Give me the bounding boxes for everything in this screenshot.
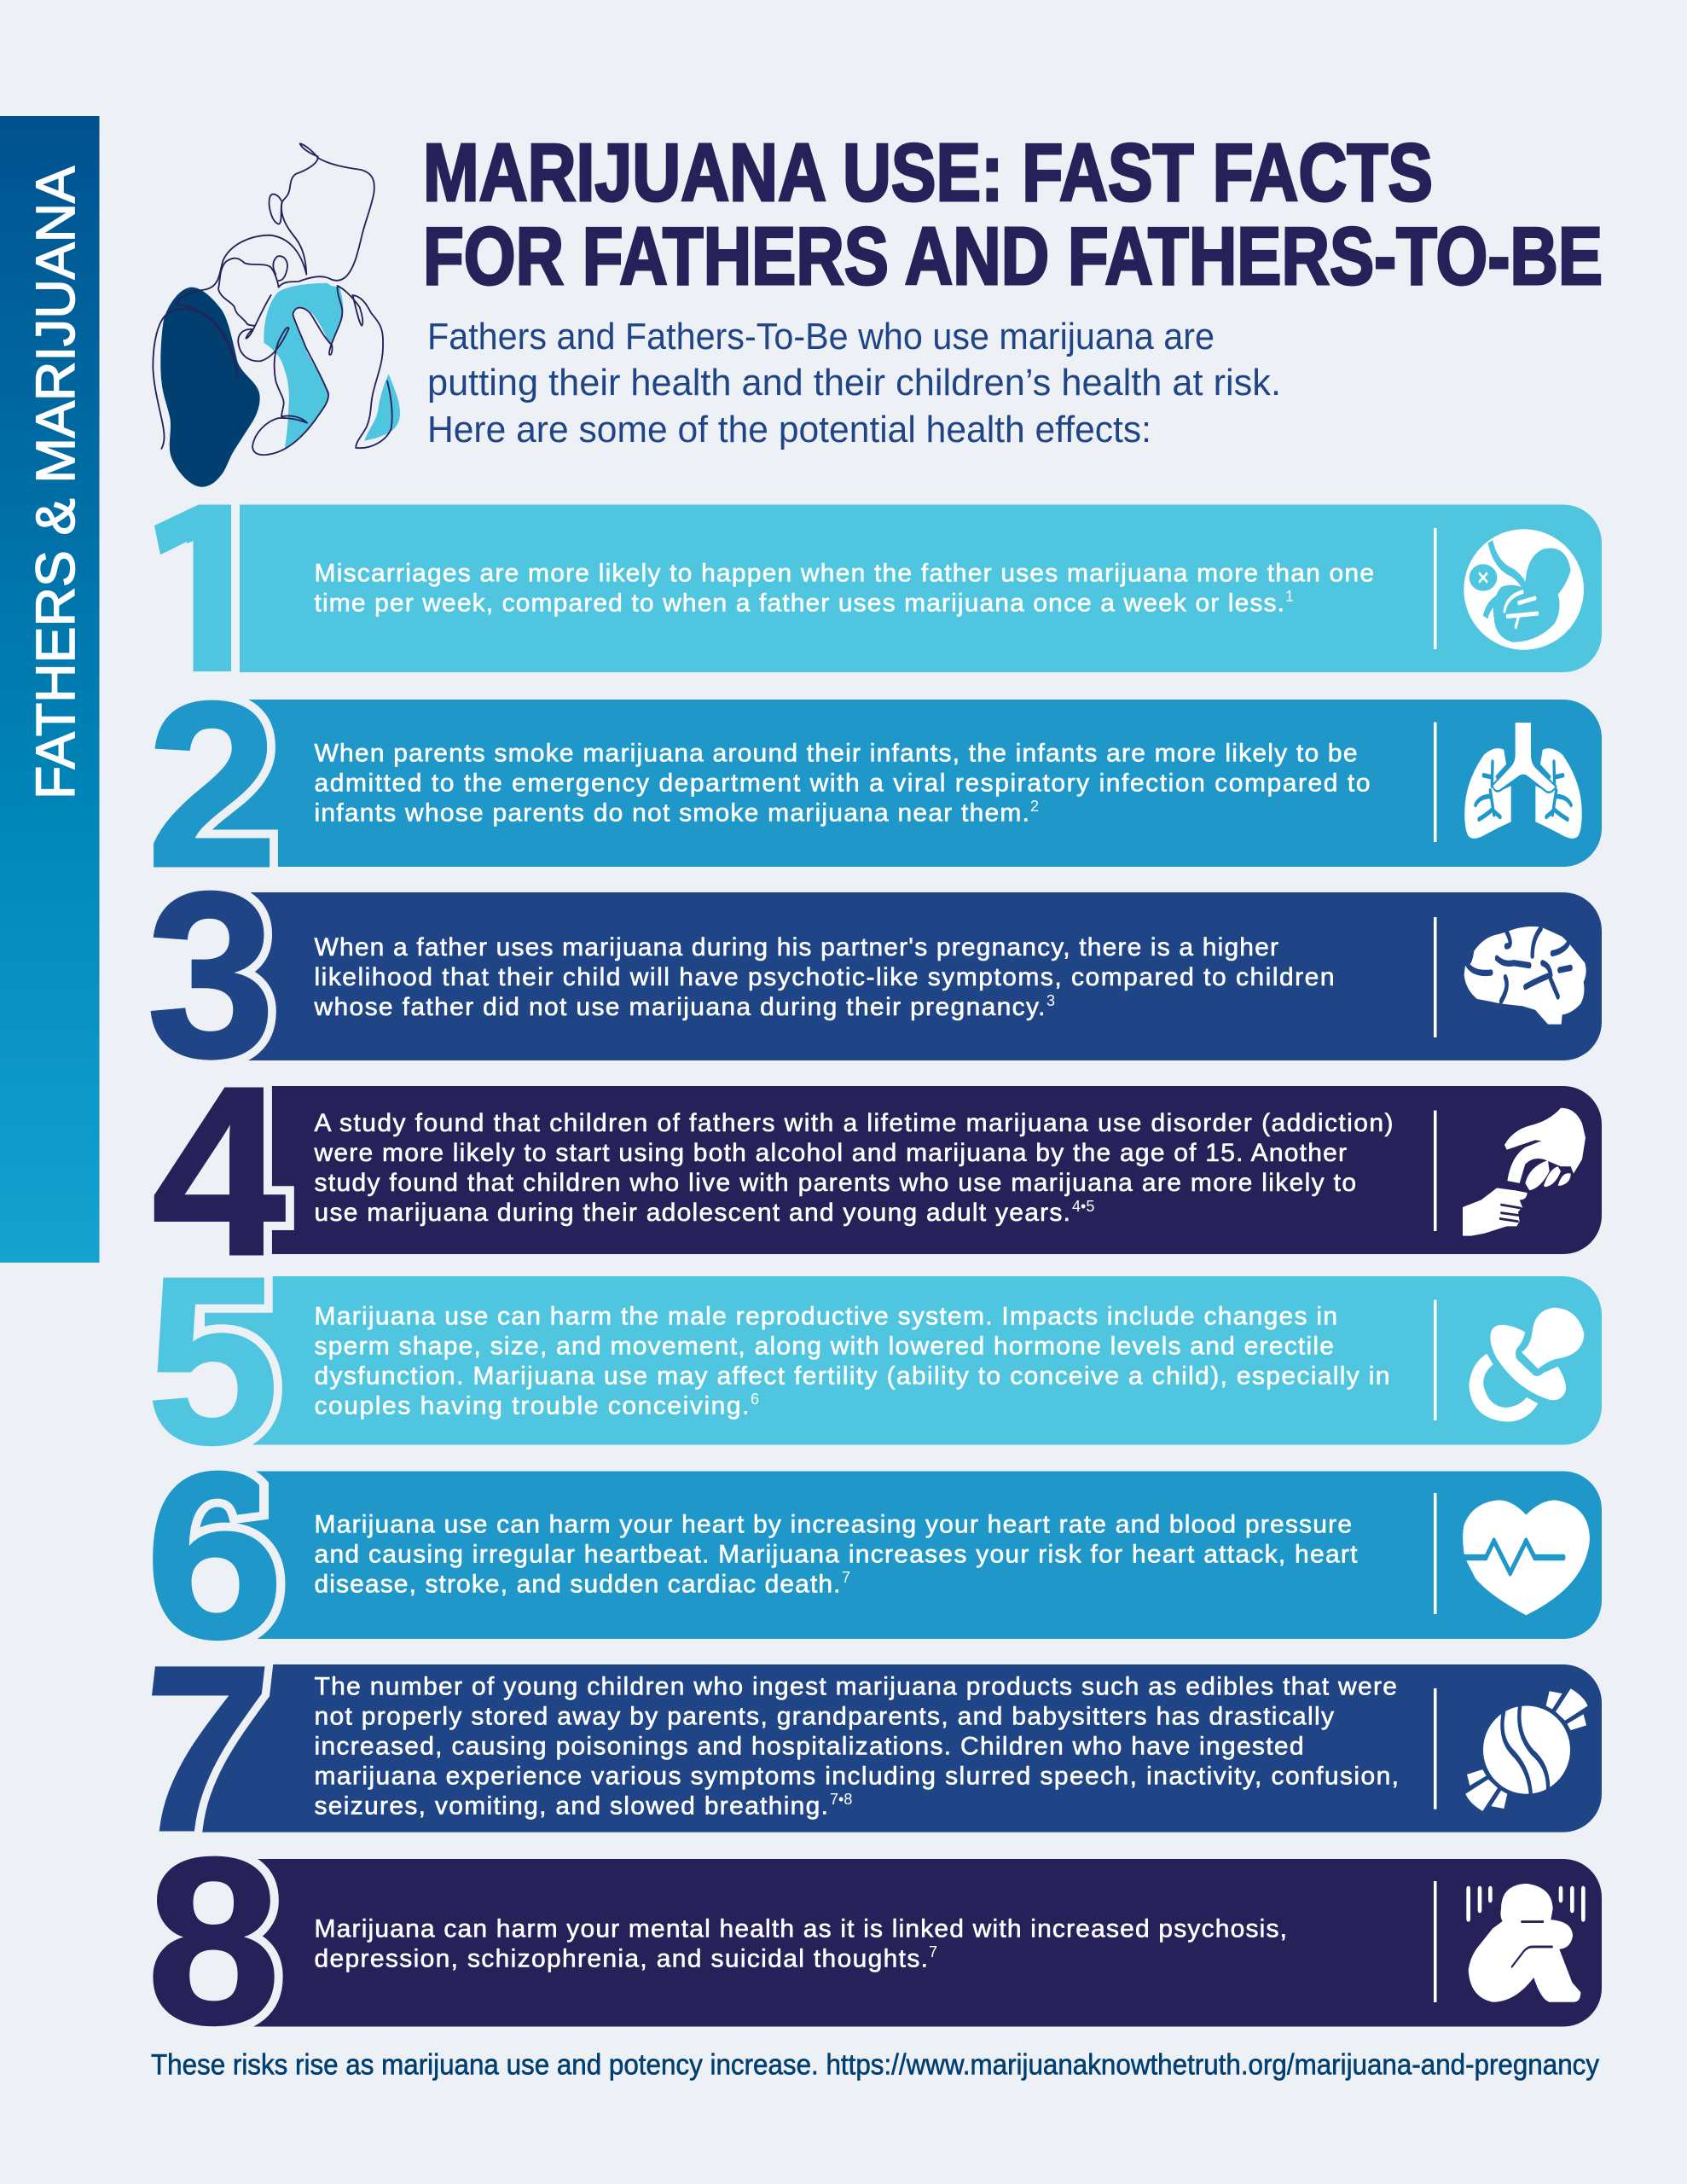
title <box>423 127 1603 302</box>
icon: hands <box>1463 1108 1586 1236</box>
text 7 <box>314 1673 1399 1821</box>
bar 5 <box>205 1276 1602 1445</box>
number 3: 3 <box>147 842 275 1107</box>
bar 3 <box>213 892 1602 1060</box>
bar 4 <box>252 1086 1602 1254</box>
text 5: couples having trouble conceiving. <box>314 1391 749 1420</box>
text 5: 6 <box>751 1391 759 1408</box>
text 4 <box>314 1109 1394 1227</box>
subtitle: putting their health and their children’s health at risk. <box>427 362 1281 404</box>
icon: fetus <box>1464 529 1584 650</box>
panel: fact 5 <box>147 1228 1602 1494</box>
cyan torso shape <box>264 283 343 448</box>
text 8: Marijuana can harm your mental health as it is linked with increased psychosis, <box>314 1915 1287 1943</box>
text 7: not properly stored away by parents, grandparents, and babysitters has drastically <box>314 1703 1334 1731</box>
text 3: When a father uses marijuana during his partner's pregnancy, there is a higher <box>314 933 1278 961</box>
subtitle: Fathers and Fathers-To-Be who use marijuana are <box>427 316 1215 357</box>
text 5 <box>314 1302 1389 1420</box>
number 5: 5 <box>147 1228 279 1494</box>
bar 8 <box>213 1859 1602 2027</box>
text 8 <box>314 1915 1287 1973</box>
text 8: 7 <box>929 1943 937 1960</box>
text 5: sperm shape, size, and movement, along with lowered hormone levels and erectile <box>314 1332 1334 1360</box>
sidebar: Fathers & Marijuana: FATHERS & MARIJUANA <box>25 166 86 799</box>
text 8: depression, schizophrenia, and suicidal thoughts. <box>314 1945 928 1973</box>
subtitle: Here are some of the potential health effects: <box>427 409 1151 450</box>
text 6 <box>314 1511 1358 1599</box>
panel: fact 2 <box>147 653 1602 916</box>
number 7: 7 <box>122 1617 279 1880</box>
subtitle <box>427 316 1281 450</box>
text 2 <box>314 739 1371 827</box>
text 2: infants whose parents do not smoke marijuana near them. <box>314 799 1029 827</box>
panel: fact 1 <box>154 505 1602 672</box>
number 6: 6 <box>145 1422 284 1687</box>
text 3: whose father did not use marijuana during their pregnancy. <box>314 993 1046 1021</box>
text 1: 1 <box>1285 588 1294 605</box>
number 8: 8 <box>147 1809 281 2074</box>
text 1 <box>314 560 1374 618</box>
bar 6 <box>194 1471 1602 1639</box>
panel: fact 3 <box>147 842 1602 1107</box>
text 7: marijuana experience various symptoms including slurred speech, inactivity, confusion, <box>314 1763 1399 1791</box>
icon: pacifier <box>1469 1308 1584 1422</box>
text 3: 3 <box>1046 992 1055 1009</box>
text 2: When parents smoke marijuana around their infants, the infants are more likely to be <box>314 739 1358 767</box>
dark blue blob <box>160 288 260 487</box>
text 7: seizures, vomiting, and slowed breathing. <box>314 1792 828 1821</box>
text 1: time per week, compared to when a father uses marijuana once a week or less. <box>314 590 1284 618</box>
text 2: admitted to the emergency department with a viral respiratory infection compared to <box>314 769 1371 797</box>
text 7: 7•8 <box>830 1791 852 1808</box>
text 4: study found that children who live with parents who use marijuana are more likely to <box>314 1169 1356 1197</box>
panel: fact 7 <box>122 1617 1602 1880</box>
text 7: The number of young children who ingest marijuana products such as edibles that were <box>314 1673 1397 1701</box>
text 2: 2 <box>1030 798 1039 815</box>
text 4: A study found that children of fathers with a lifetime marijuana use disorder (addiction) <box>314 1109 1394 1137</box>
icon: brain <box>1464 926 1586 1025</box>
text 6: Marijuana use can harm your heart by increasing your heart rate and blood pressure <box>314 1511 1352 1539</box>
text 6: disease, stroke, and sudden cardiac death. <box>314 1571 841 1599</box>
number 3: 3 <box>147 842 275 1107</box>
number 4: 4 <box>152 1037 287 1305</box>
text 3: likelihood that their child will have psychotic-like symptoms, compared to children <box>314 963 1334 991</box>
text 4: were more likely to start using both alcohol and marijuana by the age of 15. Another <box>314 1139 1347 1167</box>
number 4: 4 <box>152 1037 287 1305</box>
number 5: 5 <box>147 1228 279 1494</box>
number 6: 6 <box>145 1422 284 1687</box>
number 6 <box>153 1471 285 1641</box>
icon: distressed person <box>1466 1884 1586 2002</box>
cyan teardrop shape <box>364 374 400 441</box>
text 4: use marijuana during their adolescent and young adult years. <box>314 1199 1070 1227</box>
number 8: 8 <box>147 1809 281 2074</box>
text 3 <box>314 933 1334 1021</box>
panel: fact 4 <box>152 1037 1602 1305</box>
text 6: 7 <box>842 1569 850 1586</box>
icon: lungs <box>1464 723 1582 839</box>
title: MARIJUANA USE: FAST FACTS <box>423 127 1433 218</box>
icon: candy <box>1465 1688 1588 1811</box>
bar 7 <box>188 1664 1602 1833</box>
icon: heart with pulse <box>1461 1500 1590 1615</box>
panel: fact 8 <box>147 1809 1602 2074</box>
number 7: 7 <box>122 1617 279 1880</box>
illustration: father holding baby <box>153 143 400 487</box>
bar 2 <box>205 700 1602 867</box>
sidebar: Fathers & Marijuana <box>0 116 99 1263</box>
number 2: 2 <box>147 653 278 916</box>
text 5: dysfunction. Marijuana use may affect fertility (ability to conceive a child), especially in <box>314 1362 1389 1390</box>
panel: fact 6 <box>145 1422 1602 1687</box>
text 6: and causing irregular heartbeat. Marijuana increases your risk for heart attack, heart <box>314 1541 1358 1569</box>
text 5: Marijuana use can harm the male reproductive system. Impacts include changes in <box>314 1302 1337 1330</box>
footer note: These risks rise as marijuana use and potency increase. https://www.marijuanaknowthetruth.org/marijuana-and-pregnancy <box>151 2049 1599 2082</box>
text 4: 4•5 <box>1072 1198 1094 1215</box>
number 2: 2 <box>147 653 278 916</box>
number 1: 1 <box>122 454 289 723</box>
text 1: Miscarriages are more likely to happen when the father uses marijuana more than one <box>314 560 1374 588</box>
text 7: increased, causing poisonings and hospitalizations. Children who have ingested <box>314 1733 1304 1761</box>
line art <box>153 143 392 455</box>
bar 1 <box>240 505 1602 672</box>
